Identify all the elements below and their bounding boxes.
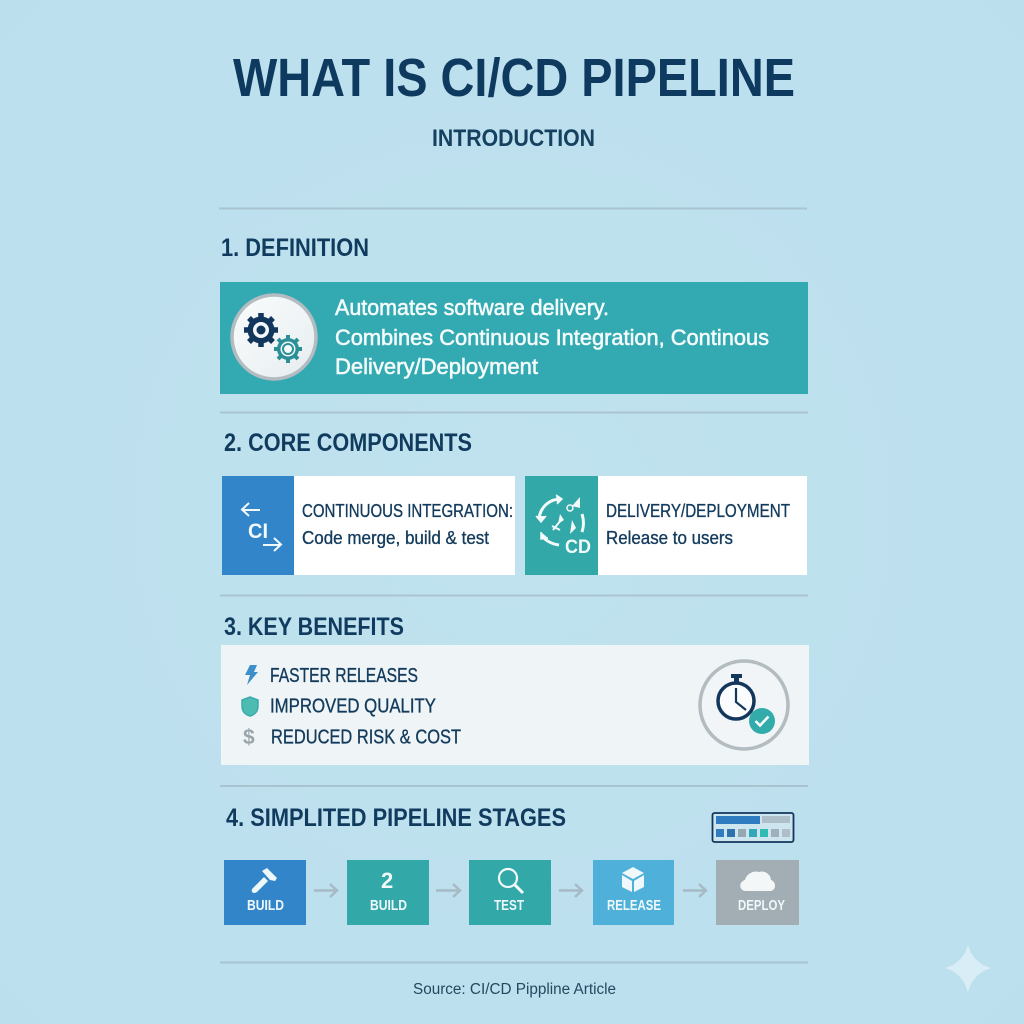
benefit: improved quality: IMPROVED QUALITY bbox=[270, 694, 436, 718]
stage: release: RELEASE bbox=[607, 898, 661, 914]
icon: box bbox=[622, 867, 644, 892]
heading: key benefits: 3. KEY BENEFITS bbox=[224, 613, 404, 641]
stage: build 2 bbox=[347, 860, 429, 925]
icon: dollar sign: $ bbox=[243, 726, 255, 749]
icon: cloud bbox=[740, 871, 775, 891]
arrow bbox=[559, 884, 582, 897]
stage: build 1 bbox=[224, 860, 306, 925]
arrow bbox=[314, 884, 337, 897]
arrow bbox=[683, 884, 706, 897]
icon: shield bbox=[242, 697, 258, 716]
panel: key benefits bbox=[221, 645, 809, 765]
icon: sparkle bbox=[944, 944, 992, 993]
panel: delivery deployment bbox=[525, 476, 807, 575]
icon: CI arrows bbox=[242, 503, 281, 551]
arrow bbox=[436, 884, 460, 897]
icon: CD rocket cycle: CD bbox=[565, 537, 591, 558]
icon: CD rocket cycle bbox=[536, 495, 591, 558]
icon: stopwatch with check bbox=[700, 661, 788, 749]
stage: deploy: DEPLOY bbox=[738, 898, 785, 914]
heading: core components: 2. CORE COMPONENTS bbox=[224, 429, 472, 457]
panel: continuous integration: CONTINUOUS INTEGRATION: bbox=[302, 500, 513, 521]
benefit: faster releases: FASTER RELEASES bbox=[270, 664, 418, 687]
stage: build 2: BUILD bbox=[370, 898, 407, 914]
stage: release bbox=[593, 860, 674, 925]
subtitle: INTRODUCTION bbox=[432, 125, 595, 152]
heading: definition: 1. DEFINITION bbox=[221, 234, 369, 262]
definition text: Delivery/Deployment bbox=[335, 354, 538, 379]
icon: CI arrows: CI bbox=[248, 520, 268, 543]
panel: delivery deployment: Release to users bbox=[606, 527, 733, 548]
title: WHAT IS CI/CD PIPELINE bbox=[233, 48, 795, 108]
panel: definition bbox=[220, 282, 808, 394]
icon: lightning bolt bbox=[245, 665, 258, 685]
icon: magnifier bbox=[499, 869, 523, 893]
definition text: Automates software delivery. bbox=[335, 295, 609, 320]
panel: continuous integration bbox=[222, 476, 515, 575]
stage: test bbox=[469, 860, 551, 925]
benefit: reduced risk and cost: REDUCED RISK & COST bbox=[271, 726, 461, 748]
icon: hammer bbox=[252, 868, 277, 893]
icon: dashboard bbox=[712, 813, 794, 842]
panel: delivery deployment: DELIVERY/DEPLOYMENT bbox=[606, 500, 790, 521]
heading: pipeline stages: 4. SIMPLITED PIPELINE STAGES bbox=[226, 804, 566, 832]
stage: deploy bbox=[716, 860, 799, 925]
stage: test: TEST bbox=[494, 898, 524, 914]
icon: gears bbox=[232, 295, 316, 379]
stage: build 1: BUILD bbox=[247, 898, 284, 914]
stage: build 2: 2 bbox=[381, 868, 393, 893]
definition text bbox=[335, 295, 769, 379]
panel: continuous integration: Code merge, build & test bbox=[302, 527, 489, 548]
definition text: Combines Continuous Integration, Continous bbox=[335, 325, 769, 350]
source footer: Source: CI/CD Pippline Article bbox=[413, 981, 616, 998]
